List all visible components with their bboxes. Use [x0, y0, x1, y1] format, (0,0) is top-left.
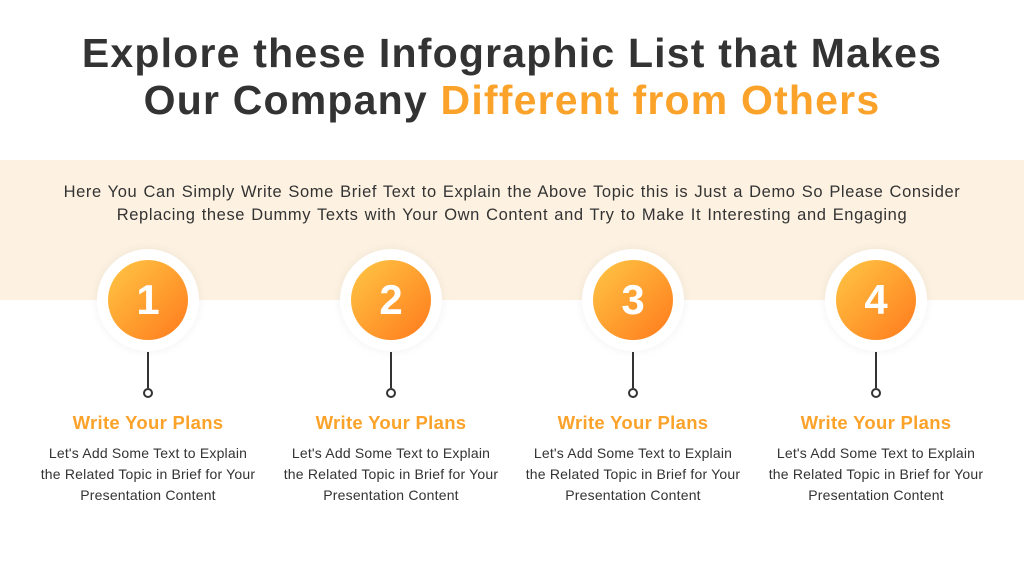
icon: number 1 circle: 1	[136, 276, 160, 323]
connector line	[632, 352, 634, 388]
background band	[0, 160, 1024, 300]
step text: Let's Add Some Text to Explain	[292, 445, 490, 461]
subtitle text: Replacing these Dummy Texts with Your Own Content and Try to Make It Interesting and Engaging	[117, 206, 907, 224]
icon: number 1 circle	[97, 249, 199, 351]
step text	[40, 445, 255, 503]
subtitle text: Here You Can Simply Write Some Brief Text to Explain the Above Topic this is Just a Demo So Please Consider	[64, 183, 960, 201]
step text: Presentation Content	[323, 487, 459, 503]
subtitle text	[64, 183, 960, 224]
connector dot	[628, 388, 638, 398]
title	[82, 30, 942, 123]
step text: Presentation Content	[565, 487, 701, 503]
connector dot	[871, 388, 881, 398]
icon: number 2 circle: 2	[379, 276, 403, 323]
icon: number 4 circle: 4	[864, 276, 888, 323]
step text: the Related Topic in Brief for Your	[526, 466, 740, 482]
step text: Presentation Content	[808, 487, 944, 503]
icon: number 4 circle	[825, 249, 927, 351]
step text: the Related Topic in Brief for Your	[41, 466, 255, 482]
step 4	[768, 249, 983, 503]
icon: number 3 circle	[582, 249, 684, 351]
icon: number 3 circle: 3	[621, 276, 645, 323]
step text: Let's Add Some Text to Explain	[49, 445, 247, 461]
step text	[768, 445, 983, 503]
step heading: Write Your Plans	[316, 412, 466, 433]
connector line	[875, 352, 877, 388]
step 3	[526, 249, 740, 503]
step text: Presentation Content	[80, 487, 216, 503]
step text: Let's Add Some Text to Explain	[777, 445, 975, 461]
step text: Let's Add Some Text to Explain	[534, 445, 732, 461]
step 2	[284, 249, 498, 503]
step text: the Related Topic in Brief for Your	[284, 466, 498, 482]
connector line	[147, 352, 149, 388]
step text	[284, 445, 498, 503]
step heading: Write Your Plans	[801, 412, 951, 433]
step heading: Write Your Plans	[558, 412, 708, 433]
title: Explore these Infographic List that Makes	[82, 30, 942, 76]
step heading: Write Your Plans	[73, 412, 223, 433]
title: Our Company Different from Others	[144, 77, 880, 123]
step text	[526, 445, 740, 503]
step 1	[40, 249, 255, 503]
connector line	[390, 352, 392, 388]
connector dot	[386, 388, 396, 398]
icon: number 2 circle	[340, 249, 442, 351]
step text: the Related Topic in Brief for Your	[769, 466, 983, 482]
connector dot	[143, 388, 153, 398]
